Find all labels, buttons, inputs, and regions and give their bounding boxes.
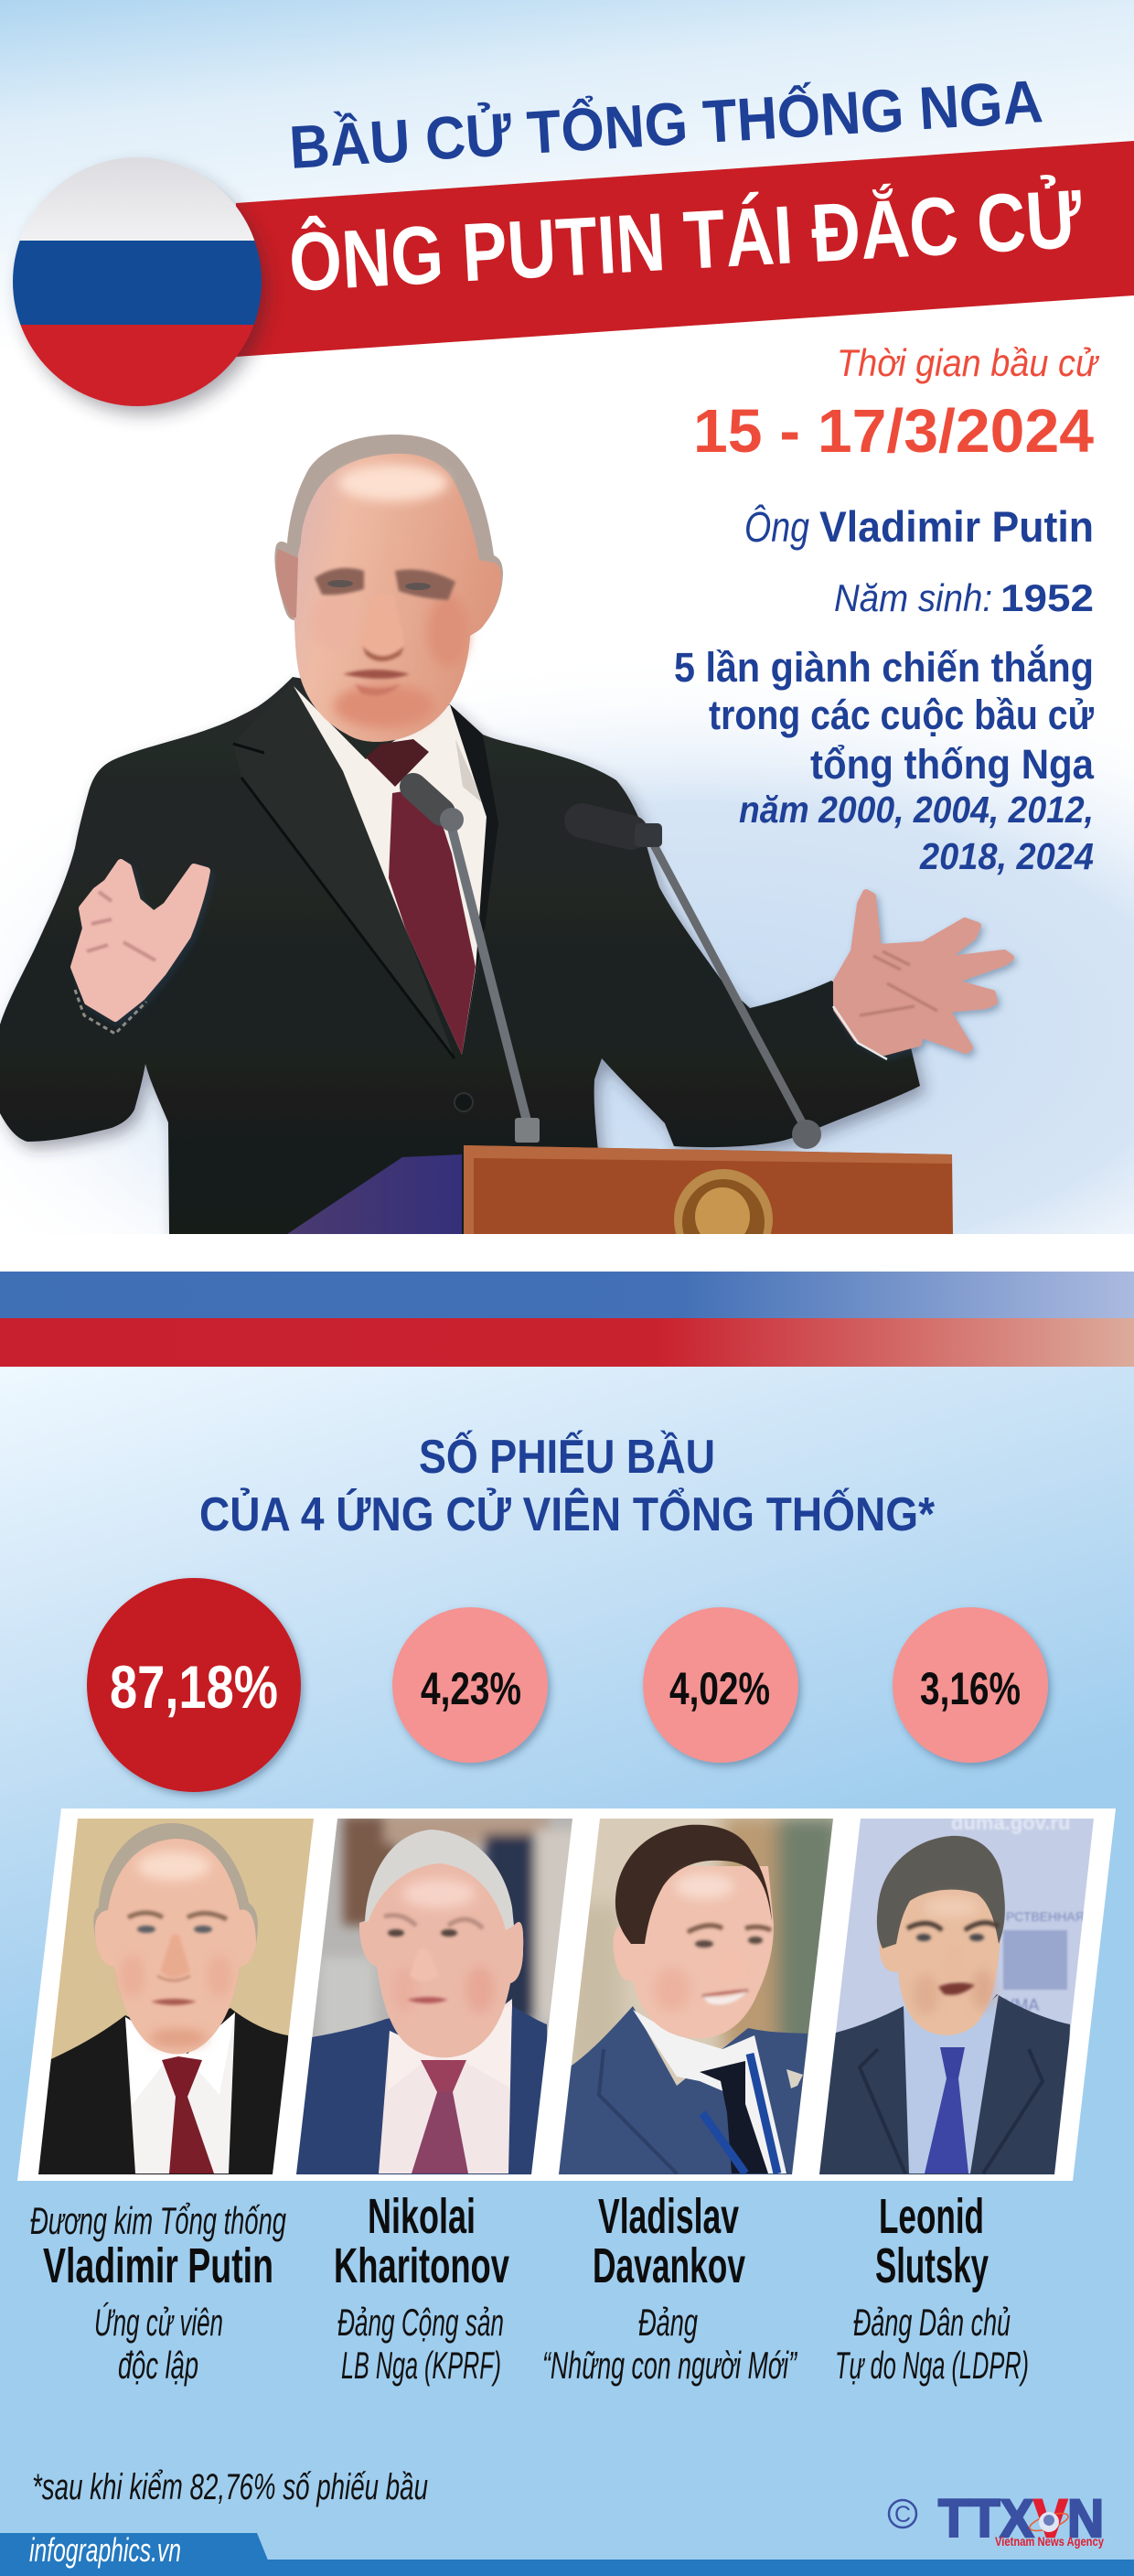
caption: Vladislav Davankov: Đảng — [638, 2301, 698, 2344]
election info text block: 2018, 2024 — [919, 835, 1094, 877]
caption: Nikolai Kharitonov — [334, 2189, 509, 2387]
caption: Vladislav Davankov: Davankov — [593, 2238, 745, 2293]
title: election heading: BẦU CỬ TỔNG THỐNG NGA — [287, 67, 1044, 181]
caption: Vladislav Davankov: Vladislav — [598, 2189, 739, 2244]
lapel lines — [233, 744, 455, 1058]
caption: Vladimir Putin — [30, 2199, 286, 2387]
left lapel tone — [316, 871, 452, 1053]
election info text block: Vladimir Putin — [819, 502, 1094, 551]
portrait: Leonid Slutsky — [814, 1811, 1097, 2177]
vote circle: Davankov — [643, 1607, 798, 1763]
logo: TTXVN — [889, 2489, 1104, 2549]
caption: Vladimir Putin: Ứng cử viên — [94, 2301, 223, 2344]
copyright mark — [889, 2500, 916, 2528]
caption: Leonid Slutsky — [835, 2189, 1029, 2387]
portrait: Vladimir Putin — [27, 1816, 320, 2177]
icon: Russian flag badge — [13, 157, 266, 413]
heading: vote share: SỐ PHIẾU BẦU — [419, 1430, 715, 1484]
separator white band — [0, 1234, 1134, 1272]
election info text block: 15 - 17/3/2024 — [693, 397, 1094, 466]
caption: Vladimir Putin: độc lập — [118, 2344, 198, 2387]
caption: Vladislav Davankov: “Những con người Mới” — [542, 2344, 797, 2387]
copyright mark: C — [894, 2502, 911, 2528]
caption: Nikolai Kharitonov: LB Nga (KPRF) — [341, 2344, 501, 2387]
podium — [287, 1145, 953, 1234]
globe — [1028, 2510, 1070, 2534]
footer bar — [0, 2533, 1134, 2576]
separator: blue stripe — [0, 1272, 1134, 1318]
caption: Leonid Slutsky: Slutsky — [875, 2238, 989, 2293]
vote circle: Slutsky — [893, 1607, 1048, 1763]
election info text block: năm 2000, 2004, 2012, — [739, 789, 1094, 831]
election info text block: Thời gian bầu cử — [837, 341, 1100, 384]
portrait: Leonid Slutsky: УМА — [1004, 1996, 1039, 2014]
agency tagline: Vietnam News Agency — [995, 2534, 1104, 2549]
microphone: right — [582, 821, 821, 1149]
photo strip white panel — [17, 1809, 1116, 2181]
vote circle: Kharitonov: 4,23% — [421, 1663, 521, 1714]
election info text block: 5 lần giành chiến thắng — [674, 644, 1094, 691]
portrait: Leonid Slutsky: РСТВЕННАЯ — [1006, 1909, 1085, 1924]
footer website: infographics.vn — [29, 2531, 181, 2569]
vote circle: Putin — [87, 1578, 301, 1792]
caption: Nikolai Kharitonov: Kharitonov — [334, 2238, 509, 2293]
election info text block: tổng thống Nga — [810, 741, 1095, 788]
button — [455, 1093, 473, 1111]
heading: vote share — [199, 1430, 936, 1541]
caption: Vladislav Davankov — [542, 2189, 797, 2387]
suit body — [0, 677, 920, 1234]
tie — [366, 739, 476, 1055]
vote circle: Davankov: 4,02% — [669, 1663, 770, 1714]
caption: Vladimir Putin: Vladimir Putin — [43, 2238, 273, 2293]
portrait: Nikolai Kharitonov — [293, 1816, 581, 2177]
head — [274, 435, 503, 742]
election info text block — [674, 341, 1100, 877]
vote circle: Putin: 87,18% — [110, 1653, 278, 1721]
red title banner — [236, 141, 1134, 357]
right hand — [837, 893, 1011, 1052]
portrait: Vladislav Davankov — [549, 1816, 841, 2177]
caption: Leonid Slutsky: Đảng Dân chủ — [853, 2301, 1011, 2344]
election info text block: Năm sinh: — [834, 576, 992, 619]
footnote: *sau khi kiểm 82,76% số phiếu bầu — [32, 2467, 428, 2507]
portrait: Leonid Slutsky: duma.gov.ru — [951, 1811, 1070, 1834]
shirt — [294, 686, 487, 1055]
election info text block: Ông — [744, 503, 809, 551]
caption: Nikolai Kharitonov: Nikolai — [368, 2189, 476, 2244]
main photo: Vladimir Putin at podium — [0, 435, 1011, 1270]
caption: Vladimir Putin: Đương kim Tổng thống — [30, 2199, 286, 2242]
page background: top section — [0, 0, 1134, 1418]
left hand — [74, 863, 207, 1018]
separator: red stripe — [0, 1318, 1134, 1367]
lower section background — [0, 1367, 1134, 2576]
caption: Nikolai Kharitonov: Đảng Cộng sản — [337, 2301, 504, 2344]
right lapel — [450, 704, 498, 1055]
caption: Leonid Slutsky: Leonid — [879, 2189, 984, 2244]
heading: vote share: CỦA 4 ỨNG CỬ VIÊN TỔNG THỐNG* — [199, 1487, 936, 1541]
microphone: left — [413, 787, 540, 1143]
vote circle: Kharitonov — [392, 1607, 548, 1763]
election info text block: 1952 — [1000, 576, 1094, 619]
vote circle: Slutsky: 3,16% — [920, 1663, 1021, 1714]
wordmark: TTXVN — [938, 2489, 1104, 2549]
